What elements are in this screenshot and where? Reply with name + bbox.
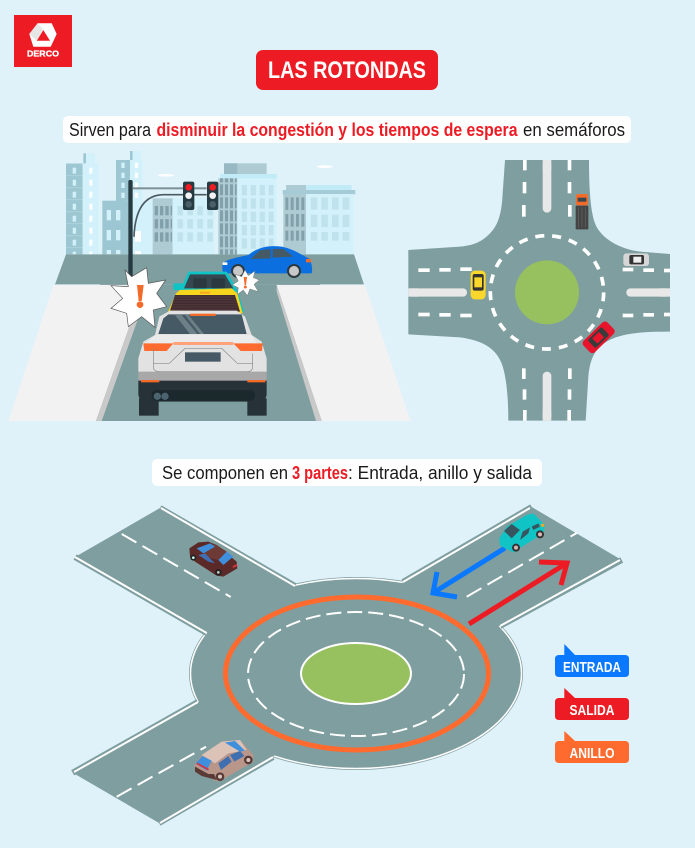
label: salida: SALIDA [570,702,615,719]
beige car [194,740,253,782]
subtitle: parts [152,459,542,486]
subtitle: congestion [63,116,631,143]
road surface with three arms [73,507,622,823]
subtitle: congestion: Sirven para [69,120,152,140]
label: entrada: ENTRADA [563,659,621,676]
logo: Derco [14,15,72,67]
white car, top view [623,253,649,266]
central island [515,260,579,324]
label: entrada [555,644,629,677]
red car, top view [581,320,616,355]
road cross [408,160,670,421]
inner dashed lane [248,612,464,736]
red arrow: salida [469,562,567,624]
central island [301,643,411,704]
logo: Derco: DERCO [27,48,59,58]
white SUV, rear view [138,311,267,416]
subtitle: congestion: disminuir la congestión y los tiempos de espera [156,120,518,140]
alert burst, large [111,268,167,327]
title: LAS ROTONDAS [268,57,426,84]
subtitle: parts: Se componen en [162,463,288,483]
dashed ring [490,236,604,349]
lane dashes [418,160,670,421]
label: anillo: ANILLO [570,745,615,762]
blue car [222,246,312,278]
yellow car, top view [471,271,486,299]
subtitle: parts: : Entrada, anillo y salida [348,463,533,483]
teal car [499,513,545,552]
label: anillo [555,731,629,763]
teal car [173,272,244,313]
truck [576,194,588,229]
brown car [189,542,238,577]
lane separators [408,160,670,421]
label: salida [555,688,629,720]
title [256,50,438,90]
arm lane dashes [117,533,577,797]
blue arrow: entrada [433,548,505,597]
alert burst, small [232,270,259,296]
street surface [8,254,411,421]
orange ring: anillo [226,597,488,750]
subtitle: congestion: en semáforos [523,120,625,140]
yellow car [168,288,243,313]
panel: isometric roundabout diagram [73,507,629,823]
city buildings [66,151,355,254]
traffic light [128,180,218,278]
subtitle: parts: 3 partes [292,463,348,483]
panel: top view of roundabout [408,160,670,421]
panel: traffic jam street scene [8,151,411,421]
